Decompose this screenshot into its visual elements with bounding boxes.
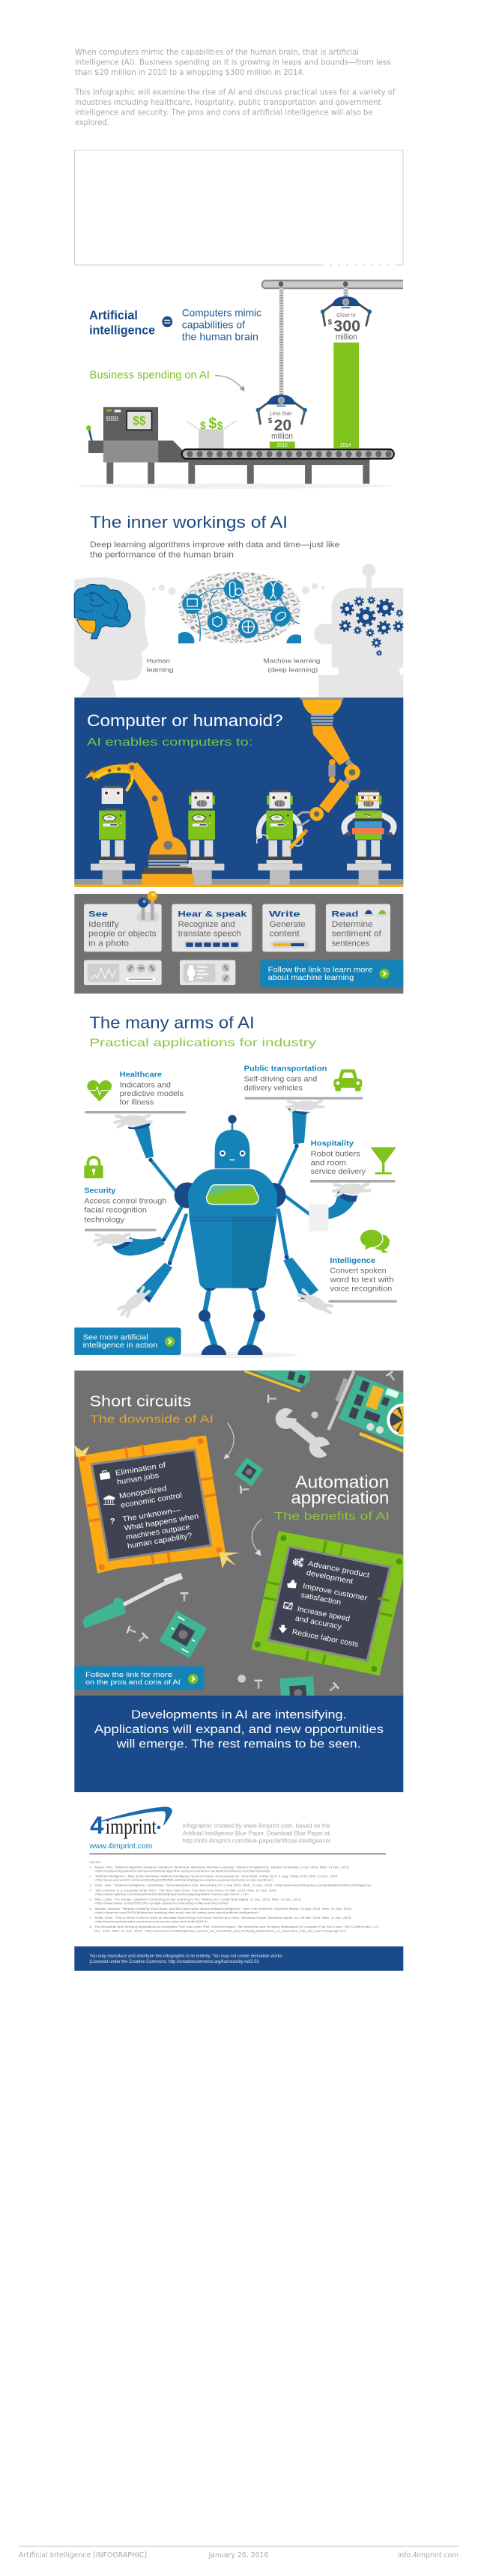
bar: 2014 close to 300 million: 2014 <box>340 443 351 448</box>
source list: Clark, Jack. "Artificial Intelligence - QuickTake." BloombergView.com. Bloomberg LP, 9 July 2015. Web. 21 Dec. 2015. <http://www.bloombergview.com/quicktake/artificial-intelligence> <box>94 1883 372 1887</box>
intro text block <box>74 47 396 127</box>
robot: see <box>91 785 135 885</box>
logo: 4imprint: imprint <box>106 1815 157 1839</box>
card: hear and speak <box>172 904 252 951</box>
closing statement banner: Developments in AI are intensifying. <box>131 1708 347 1721</box>
overhead crane rail <box>262 278 415 395</box>
source list: 2. <box>89 1874 92 1878</box>
heading: The inner workings of AI <box>90 513 288 532</box>
chip panel: downsides: machines outpace <box>125 1523 191 1542</box>
factory floor <box>74 879 403 887</box>
definition text: Computers mimic <box>182 307 261 319</box>
page footer <box>19 2545 459 2560</box>
label: business spending: Business spending on AI <box>90 369 210 381</box>
thought dots <box>152 583 325 595</box>
intro text block: intelligence and security. The pros and cons of artificial intelligence will also be <box>75 108 373 117</box>
source list: 4. <box>89 1889 92 1893</box>
definition text: capabilities of <box>182 319 245 331</box>
chip panel: benefits: Improve customer <box>302 1582 369 1603</box>
tray: intelligence: Intelligence <box>330 1257 375 1265</box>
card: read: sentiment of <box>332 930 382 939</box>
control panel background <box>74 894 403 993</box>
logo: 4imprint: 4 <box>90 1812 104 1839</box>
chip panel: downsides: Monopolized <box>118 1485 167 1501</box>
label: human learning: learning <box>147 666 174 673</box>
chip panel: benefits: development <box>306 1569 354 1586</box>
source list: The Wonderful and Terrifying Implications of Computers That Can Learn. Perf. Jeremy Howard. The Wonderful and Terrifying Implications of Computer That Can Learn. TED Conferences, LLC, <box>94 1925 380 1928</box>
page footer: January 26, 2016 <box>208 2551 268 2560</box>
tray: intelligence <box>328 1229 397 1303</box>
bar: 2014 close to 300 million: Close to <box>336 312 356 318</box>
source list: "Artificial Intelligence | Rise of the Machines: Artificial Intelligence Scares People—Excessively So." Economist. 9 May 2015: n. pag. 9 May 2015. Web. 21 Dec. 2015. <box>94 1874 339 1878</box>
chip panel: benefits: and accuracy <box>294 1614 342 1631</box>
card: write: content <box>270 930 300 939</box>
license bar: (Licensed under the Creative Commons: http://creativecommons.org/licenses/by-nd/3.0/) <box>89 1959 259 1964</box>
chip panel: downsides: economic control <box>120 1491 183 1510</box>
arrow to green chip <box>252 1519 261 1556</box>
source list: <http://observer.com/2015/08/stephen-hawking-elon-musk-and-bill-gates-warn-about-artificial-intelligence/> <box>94 1910 260 1914</box>
chip panel: benefits: Increase speed <box>297 1605 351 1624</box>
heading: The many arms of AI <box>89 1013 255 1032</box>
robotic arm: right <box>296 698 360 825</box>
tray: hospitality: Hospitality <box>311 1140 354 1148</box>
deep learning network cloud <box>178 572 301 644</box>
tray: security: Security <box>84 1187 116 1195</box>
icon: equals sign <box>162 316 172 327</box>
source list: Metz, Cade. "For Google, Quantum Computing Is Like Learning to Fly." Wired.com. Conde Nast Digital, 11 Dec. 2015. Web. 21 Dec. 2015. <box>94 1898 302 1901</box>
robot floor shadow <box>172 1352 297 1358</box>
card: read: Determine <box>332 920 373 929</box>
tray: healthcare: predictive models <box>120 1090 184 1098</box>
tray: hospitality <box>310 1140 396 1183</box>
card: read <box>326 904 390 951</box>
button: pros and cons: on the pros and cons of AI <box>85 1678 181 1686</box>
license bar: You may reproduce and distribute this infographic in its entirety. You may not create derivative works. <box>89 1954 283 1959</box>
human head silhouette <box>74 577 148 697</box>
section: business spending on AI <box>76 278 415 489</box>
section: many arms of AI <box>74 1013 397 1358</box>
bar: 2010 under 20 million: 20 <box>274 417 291 434</box>
bar: 2014 close to 300 million <box>321 296 372 448</box>
blue backdrop <box>74 698 403 885</box>
source list: 5. <box>89 1898 92 1901</box>
tray: hospitality: service delivery <box>311 1168 366 1176</box>
intro text block: explored. <box>75 118 109 127</box>
source list: Smith, Dave. "This Is What It's like to Have an Adorable Robot Bring You Room Service at a Hotel." Business Insider. Business Insider, Inc, 05 Mar. 2015. Web. 21 Dec. 2015. <box>94 1916 351 1919</box>
panel: waveform display <box>84 960 162 985</box>
bar: 2010 under 20 million: 2010 <box>276 443 288 448</box>
heading: artificial intelligence <box>89 309 155 338</box>
source list: 3. <box>89 1883 92 1887</box>
robot: hear and speak <box>180 790 224 885</box>
button: see more AI in action: See more artificial <box>83 1333 148 1342</box>
chip panel: downsides: The unknown— <box>122 1506 181 1524</box>
tray: intelligence: word to text with <box>329 1276 394 1284</box>
website link: www.4imprint.com <box>88 1842 152 1851</box>
subheading: AI enables computers to: <box>87 737 252 749</box>
license bar <box>74 1946 403 1971</box>
intro text block: intelligence (AI). Business spending on it is growing in leaps and bounds—from less <box>75 57 391 67</box>
machine: $$ <box>133 415 146 427</box>
button: pros and cons: Follow the link for more <box>85 1671 172 1678</box>
card: write: Generate <box>270 920 306 929</box>
definition text: the human brain <box>182 331 258 343</box>
chip panel: downsides: What happens when <box>124 1512 199 1533</box>
section: computer or humanoid <box>74 698 403 993</box>
card: hear and speak: translate speech <box>178 930 241 939</box>
tray: hospitality: Robot butlers <box>311 1150 360 1158</box>
intro text block: than $20 million in 2010 to a whopping $300 million in 2014. <box>75 67 305 77</box>
source list: <http://engineering.stanford.edu/news/stanford-algorithm-analyzes-sentence-sentiment-advances-machine-learning> <box>94 1869 271 1872</box>
card: see: Identify <box>88 920 119 929</box>
robot with six arms <box>95 1100 369 1355</box>
section: inner workings of AI <box>74 513 418 698</box>
closing statement banner <box>74 1696 403 1792</box>
label: machine learning <box>263 657 321 673</box>
chip panel: downsides: human jobs <box>116 1472 160 1487</box>
card: see: in a photo <box>88 939 129 948</box>
tray: public transportation: Self-driving cars and <box>244 1075 317 1083</box>
section: credits and sources <box>74 1806 403 1971</box>
source list: "Did a Human or a Computer Write This?" The New York Times. The New York Times, 07 Mar. 2015. Web. 21 Dec. 2015. <box>94 1889 277 1893</box>
source list <box>89 1860 380 1932</box>
money box <box>187 415 236 448</box>
button: see more AI in action: intelligence in action <box>83 1342 157 1350</box>
source list: <http://www.nytimes.com/interactive/2015/03/08/opinion/sunday/algorithm-human-quiz.html?_r=0> <box>94 1893 249 1896</box>
card: read: Read <box>331 910 358 919</box>
intro text block: When computers mimic the capabilities of the human brain, that is artificial <box>75 47 359 57</box>
card: read: sentences <box>332 939 370 948</box>
source list: Sources: <box>89 1860 101 1864</box>
grey workbench backdrop <box>74 1371 403 1696</box>
label: human learning <box>147 657 174 673</box>
arrow to orange chip <box>223 1423 234 1459</box>
heading: automation appreciation <box>291 1472 389 1507</box>
tray: public transportation: delivery vehicles <box>244 1084 303 1092</box>
tray: public transportation <box>244 1065 363 1100</box>
icon: human brain <box>74 585 130 639</box>
button: learn more about machine learning: Follow the link to learn more <box>268 966 372 974</box>
label: machine learning: (deep learning) <box>267 666 318 673</box>
attribution text: Artificial Intelligence Blue Paper. Download Blue Paper at: <box>181 1830 331 1837</box>
tray: intelligence: voice recognition <box>330 1285 392 1293</box>
money box: $ <box>200 420 206 432</box>
page footer: Artificial Intelligence [INFOGRAPHIC] <box>19 2551 147 2560</box>
robot: write <box>257 790 307 885</box>
heading: artificial intelligence: Artificial <box>89 309 138 322</box>
subheading: Deep learning algorithms improve with data and time—just like <box>90 541 339 549</box>
chip panel: downsides <box>74 1435 240 1574</box>
workbench hardware decorations <box>82 1371 420 1708</box>
section: short circuits and automation appreciation <box>74 1371 420 1792</box>
icon: levers <box>137 891 159 922</box>
intro text block: This infographic will examine the rise of AI and discuss practical uses for a variety of <box>74 87 396 97</box>
bar: 2014 close to 300 million: million <box>336 332 357 342</box>
tray: healthcare: Indicators and <box>120 1081 171 1089</box>
attribution text <box>181 1822 331 1845</box>
robot head silhouette <box>314 564 403 697</box>
source list: 8. <box>89 1925 92 1928</box>
button: see more AI in action <box>74 1327 181 1355</box>
button: learn more about machine learning <box>260 960 403 987</box>
conveyor belt <box>182 449 394 484</box>
tray: intelligence: Convert spoken <box>330 1267 387 1276</box>
label: human learning: Human <box>147 657 170 665</box>
tray: security: facial recognition <box>84 1207 147 1215</box>
heading: short circuits: Short circuits <box>89 1392 191 1410</box>
tray: security: Access control through <box>84 1197 166 1205</box>
source list: Alaraz, Tom. "Stanford Algorithm Analyzes Sentence Sentiment, Advances Machine Learning." Stanford Engineering. Stanford University, 1 Oct. 2013. Web. 21 Dec. 2015. <box>94 1865 350 1869</box>
button: pros and cons <box>74 1666 205 1690</box>
source list: <http://www.economist.com/news/briefing/21650526-artificial-intelligence-scares-peopleexcessively-so-rise-machines> <box>94 1878 274 1881</box>
subheading: Practical applications for industry <box>89 1038 317 1050</box>
label: machine learning: Machine learning <box>263 657 321 665</box>
card: hear and speak: Recognize and <box>178 920 235 929</box>
source list: Sainato, Michael. "Stephen Hawking, Elon Musk, and Bill Gates Warn About Artificial Intelligence." New York Observer. Observer Media, 19 Aug. 2015. Web. 21 Dec. 2015. <box>94 1907 352 1910</box>
button: learn more about machine learning: about machine learning <box>268 974 354 982</box>
closing statement banner: Applications will expand, and new opportunities <box>94 1723 384 1736</box>
robot: read <box>344 790 394 885</box>
source list: Dec. 2014. Web. 21 Dec. 2015. <http://www.ted.com/talks/jeremy_howard_the_wonderful_and_terrifying_implications_of_computers_that_can_learn?language=en> <box>94 1928 347 1932</box>
closing statement banner: will emerge. The rest remains to be seen. <box>116 1738 361 1750</box>
heading: Computer or humanoid? <box>87 711 283 730</box>
card: write <box>262 904 315 951</box>
money box: $ <box>217 420 223 432</box>
subheading: downside: The downside of AI <box>90 1414 214 1426</box>
subheading <box>90 541 339 559</box>
source list: <http://www.businessinsider.com/robot-room-service-video-aloft-hotel-2015-3> <box>94 1919 209 1923</box>
heading: automation appreciation: appreciation <box>291 1488 389 1507</box>
card: see <box>84 904 162 951</box>
intro text block: industries including healthcare, hospitality, public transportation and government <box>75 97 381 107</box>
floor shadow <box>76 484 393 489</box>
panel: robot display <box>180 960 235 985</box>
chip panel: benefits <box>252 1531 408 1675</box>
empty framed placeholder box <box>75 150 403 265</box>
subheading: benefits: The benefits of AI <box>274 1511 390 1523</box>
bar: 2014 close to 300 million: 300 <box>333 317 360 335</box>
bar: 2014 close to 300 million: $ <box>328 318 332 327</box>
bar: 2010 under 20 million: million <box>271 432 293 441</box>
machine gears <box>340 597 403 656</box>
logo: 4imprint <box>90 1806 172 1839</box>
bar: 2010 under 20 million: $ <box>268 417 273 425</box>
chip panel: benefits: Reduce labor costs <box>291 1628 359 1649</box>
card: hear and speak: Hear & speak <box>178 910 248 919</box>
heading: artificial intelligence: intelligence <box>89 324 155 338</box>
source list: <http://www.wired.com/2015/12/for-google-quantum-computing-is-like-learning-to-fly/> <box>94 1901 230 1905</box>
source list: 1. <box>89 1865 92 1869</box>
chip panel: benefits: satisfaction <box>300 1591 342 1607</box>
machine <box>86 407 188 484</box>
tray: security: technology <box>84 1216 124 1224</box>
bar: 2010 under 20 million <box>256 395 307 448</box>
card: see: See <box>88 910 108 919</box>
attribution text: Infographic created by www.4imprint.com, based on the <box>182 1822 330 1830</box>
tray: healthcare: Healthcare <box>120 1071 162 1080</box>
money box: $ <box>208 415 217 433</box>
tray: hospitality: and room <box>311 1159 346 1167</box>
heading: automation appreciation: Automation <box>295 1472 389 1491</box>
chip panel: downsides: human capability? <box>127 1532 193 1550</box>
source list: 7. <box>89 1916 92 1919</box>
bar: 2010 under 20 million: Less than <box>270 410 292 416</box>
chip panel: downsides: ? <box>110 1517 115 1526</box>
tray: public transportation: Public transportation <box>244 1065 327 1074</box>
source list: 6. <box>89 1907 92 1910</box>
definition text <box>182 307 261 343</box>
page footer: info.4imprint.com <box>398 2551 459 2560</box>
card: see: people or objects <box>88 930 157 939</box>
tray: security <box>84 1157 166 1231</box>
subheading: the performance of the human brain <box>90 550 234 559</box>
robotic arm: left <box>85 762 194 885</box>
attribution text: http://info.4imprint.com/blue-paper/artificial-intelligence/ <box>182 1837 331 1845</box>
tray: healthcare <box>85 1071 186 1113</box>
chip panel: benefits: Advance product <box>307 1559 370 1580</box>
chip panel: downsides: Elimination of <box>115 1461 166 1478</box>
tray: healthcare: for illness <box>120 1099 154 1107</box>
card: write: Write <box>269 910 300 919</box>
arrow to conveyor <box>215 376 245 392</box>
